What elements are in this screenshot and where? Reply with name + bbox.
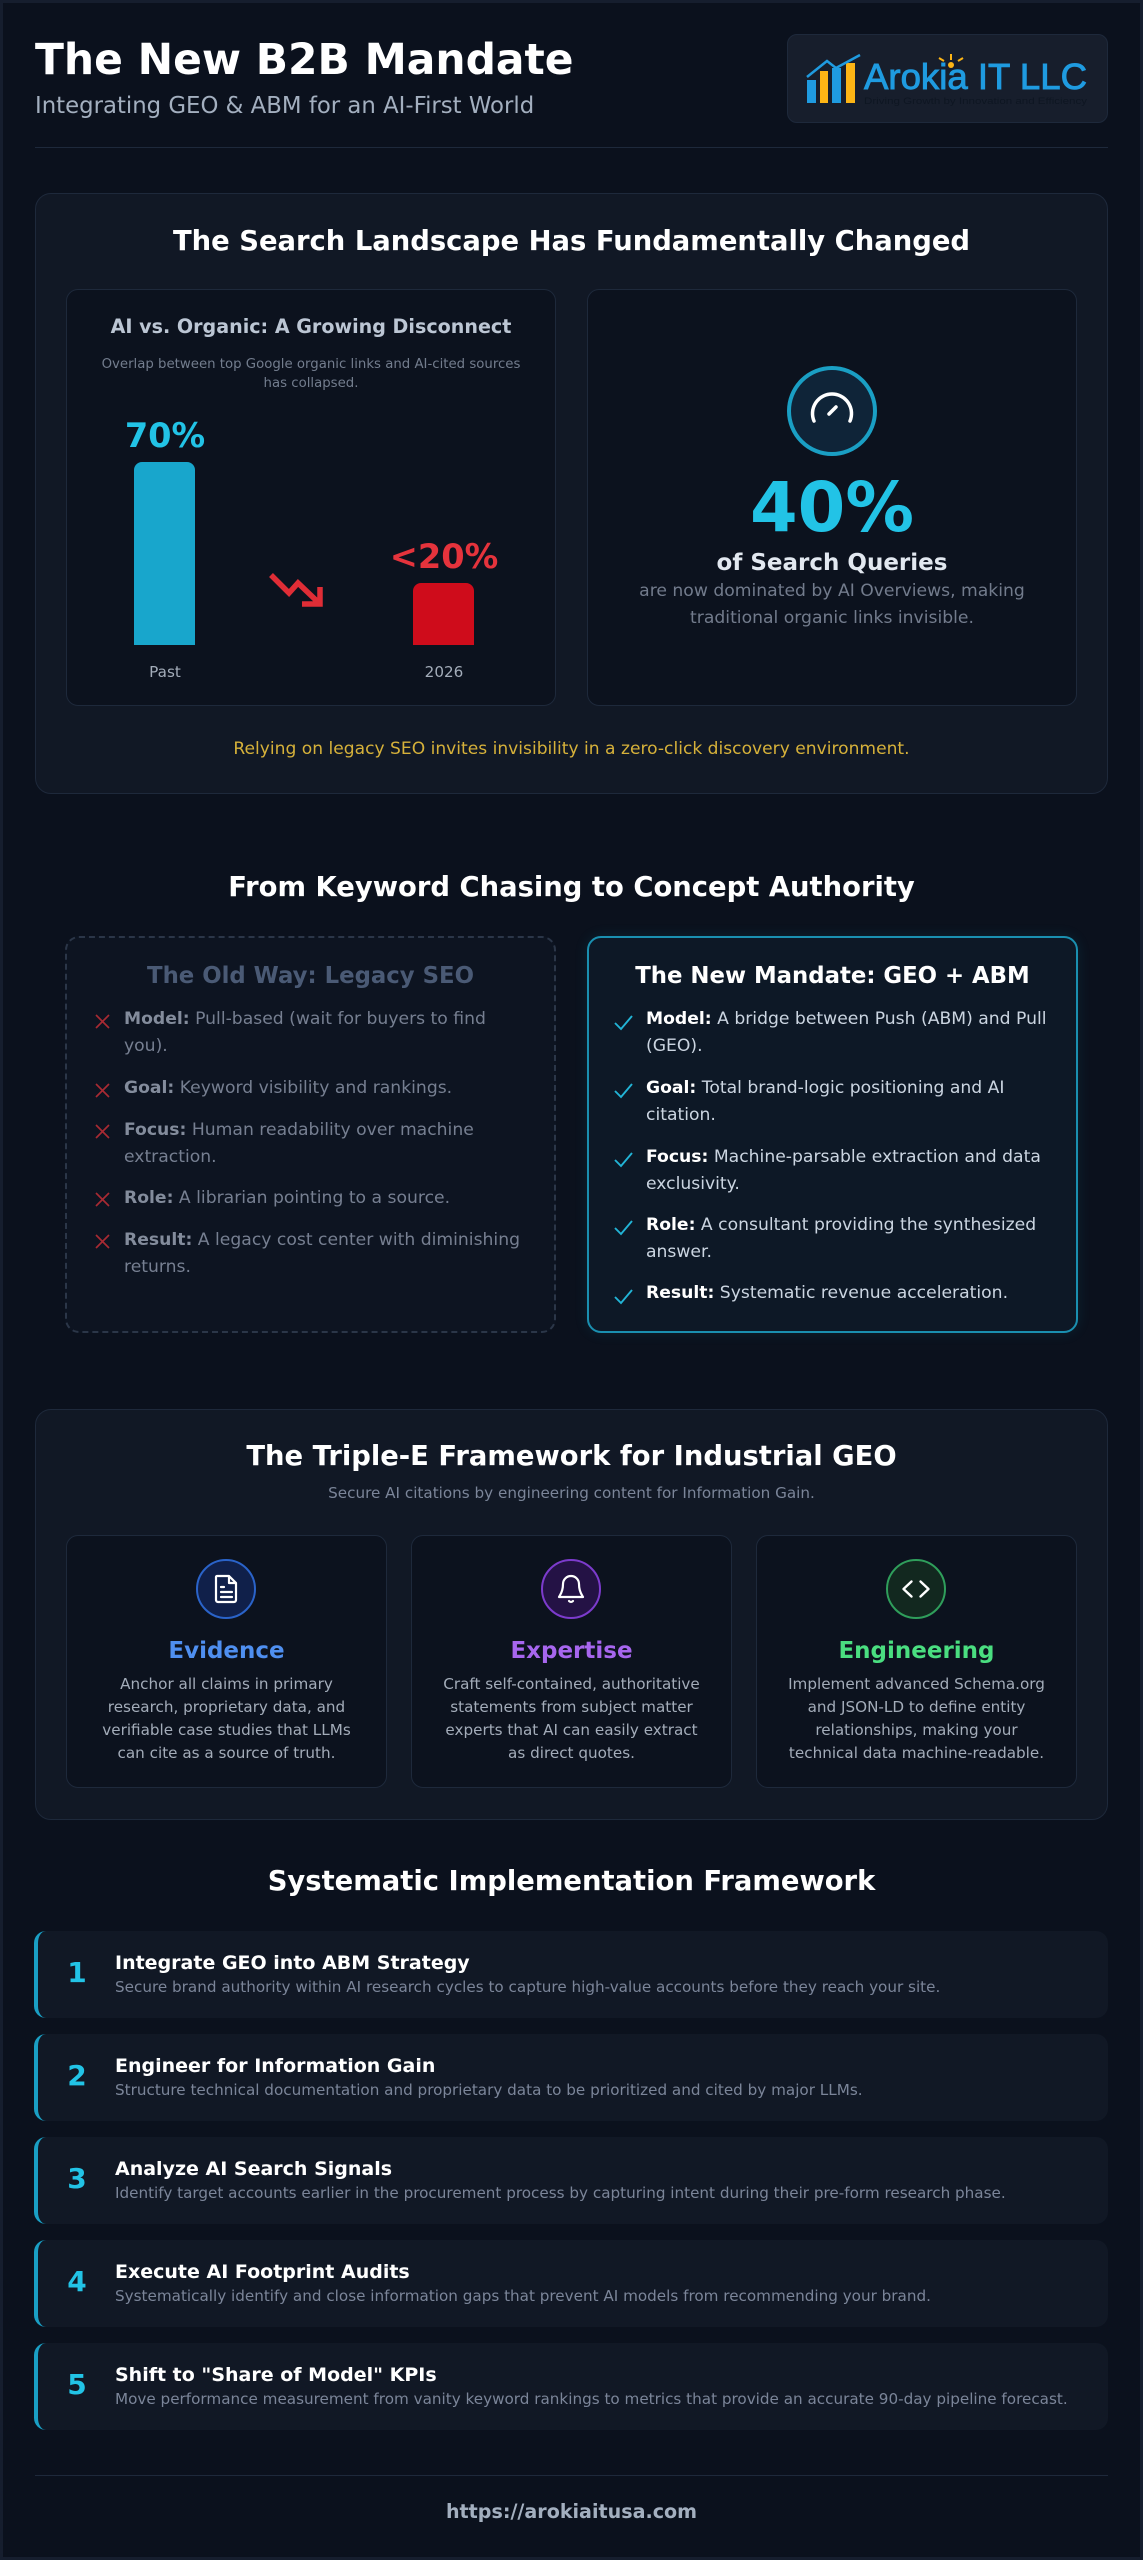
list item: goal: Goal: Total brand-logic positioning and AI	[646, 1078, 1004, 1098]
engineering title: Engineering	[838, 1638, 995, 1664]
logo	[787, 34, 1108, 123]
step description: Structure technical documentation and proprietary data to be prioritized and cited by major LLMs.	[115, 2081, 863, 2099]
card: expertise	[411, 1535, 732, 1788]
expertise text: experts that AI can easily extract	[445, 1721, 698, 1739]
value under 20%: <20%	[390, 537, 498, 576]
list item: focus: Focus: Human readability over machine	[124, 1120, 474, 1140]
icon: trending down arrow	[269, 573, 323, 607]
label past: Past	[149, 663, 181, 681]
step 5	[34, 2343, 1108, 2430]
evidence text: Anchor all claims in primary	[120, 1675, 333, 1693]
stat description	[639, 581, 1025, 628]
subheading: Secure AI citations by engineering content for Information Gain.	[328, 1484, 815, 1502]
card: engineering	[756, 1535, 1077, 1788]
icon: gauge	[787, 366, 877, 456]
engineering text: technical data machine-readable.	[789, 1744, 1044, 1762]
step number: 3	[67, 2162, 87, 2195]
expertise text: Craft self-contained, authoritative	[443, 1675, 700, 1693]
evidence text: research, proprietary data, and	[108, 1698, 345, 1716]
engineering text	[788, 1675, 1045, 1762]
title: The New B2B Mandate	[35, 35, 574, 84]
list item: focus: exclusivity.	[646, 1174, 740, 1194]
step description: Identify target accounts earlier in the procurement process by capturing intent during their pre-form research phase.	[115, 2184, 1006, 2202]
list item: result: returns.	[124, 1257, 191, 1277]
list item: model: Model: Pull-based (wait for buyers to find	[124, 1009, 486, 1029]
new mandate title: The New Mandate: GEO + ABM	[635, 963, 1030, 989]
engineering text: relationships, making your	[815, 1721, 1018, 1739]
subtitle: Integrating GEO & ABM for an AI-First World	[35, 93, 534, 119]
list item: focus: Focus: Machine-parsable extraction and data	[646, 1147, 1041, 1167]
step title: Integrate GEO into ABM Strategy	[115, 1952, 470, 1974]
logo tagline: Driving Growth by Innovation and Efficiency	[864, 96, 1088, 106]
icon: document	[196, 1559, 256, 1619]
step description: Secure brand authority within AI research cycles to capture high-value accounts before they reach your site.	[115, 1978, 940, 1996]
step number: 2	[67, 2059, 87, 2092]
panel: old way	[65, 936, 556, 1333]
chart description: has collapsed.	[264, 376, 358, 391]
list item: model: (GEO).	[646, 1036, 703, 1056]
step title: Execute AI Footprint Audits	[115, 2261, 410, 2283]
evidence text: verifiable case studies that LLMs	[102, 1721, 351, 1739]
value 70%: 70%	[125, 416, 205, 455]
step description: Move performance measurement from vanity keyword rankings to metrics that provide an accurate 90-day pipeline forecast.	[115, 2390, 1068, 2408]
expertise title: Expertise	[510, 1638, 633, 1664]
note: Relying on legacy SEO invites invisibility in a zero-click discovery environment.	[233, 739, 910, 759]
chart title: AI vs. Organic: A Growing Disconnect	[111, 315, 511, 338]
list item: goal: Goal: Keyword visibility and rankings.	[124, 1078, 452, 1098]
list item: goal: citation.	[646, 1105, 716, 1125]
icon: bell	[541, 1559, 601, 1619]
list item: role: Role: A librarian pointing to a source.	[124, 1188, 450, 1208]
list item: focus	[124, 1120, 474, 1167]
step 4	[34, 2240, 1108, 2327]
list item: result: Result: Systematic revenue acceleration.	[646, 1283, 1008, 1303]
expertise text: as direct quotes.	[508, 1744, 635, 1762]
list item: model: you).	[124, 1036, 168, 1056]
heading: implementation: Systematic Implementation Framework	[268, 1866, 875, 1897]
bar: past	[134, 462, 195, 645]
icon group: checks	[614, 1015, 633, 1304]
old way title: The Old Way: Legacy SEO	[147, 963, 474, 989]
expertise text: statements from subject matter	[450, 1698, 693, 1716]
heading: The Search Landscape Has Fundamentally Changed	[173, 226, 970, 257]
evidence text: can cite as a source of truth.	[118, 1744, 335, 1762]
stat description: traditional organic links invisible.	[690, 608, 974, 628]
panel: 40% stat	[587, 289, 1077, 706]
icon group: crosses	[96, 1014, 110, 1249]
header	[35, 34, 1108, 148]
icon: growth bars	[807, 54, 963, 103]
stat label: of Search Queries	[717, 550, 947, 576]
panel: triple-E framework	[35, 1409, 1108, 1820]
panel: AI vs organic chart	[66, 289, 556, 706]
chart description	[102, 357, 520, 391]
logo wordmark: Arokia IT LLC	[864, 56, 1087, 97]
list item: role: Role: A consultant providing the synthesized	[646, 1215, 1036, 1235]
list item: model	[124, 1009, 486, 1056]
footer url: https://arokiaitusa.com	[446, 2500, 697, 2523]
list item: role: answer.	[646, 1242, 712, 1262]
step title: Analyze AI Search Signals	[115, 2158, 392, 2180]
panel: search landscape	[35, 193, 1108, 794]
list item: result	[124, 1230, 520, 1277]
evidence text	[102, 1675, 351, 1762]
evidence title: Evidence	[168, 1638, 285, 1664]
card: evidence	[66, 1535, 387, 1788]
list item: result: Result: A legacy cost center with diminishing	[124, 1230, 520, 1250]
list item: model	[646, 1009, 1047, 1056]
list item: role	[646, 1215, 1036, 1262]
list item: model: Model: A bridge between Push (ABM) and Pull	[646, 1009, 1047, 1029]
step number: 4	[67, 2265, 87, 2298]
step title: Engineer for Information Gain	[115, 2055, 435, 2077]
step number: 5	[67, 2368, 87, 2401]
icon: code	[886, 1559, 946, 1619]
bar: 2026	[413, 583, 474, 645]
step number: 1	[67, 1956, 87, 1989]
engineering text: Implement advanced Schema.org	[788, 1675, 1045, 1693]
step title: Shift to "Share of Model" KPIs	[115, 2364, 437, 2386]
step 3	[34, 2137, 1108, 2224]
list item: goal	[646, 1078, 1004, 1125]
stat description: are now dominated by AI Overviews, making	[639, 581, 1025, 601]
step 2	[34, 2034, 1108, 2121]
stat value: 40%	[750, 468, 914, 548]
expertise text	[443, 1675, 700, 1762]
list item: focus	[646, 1147, 1041, 1194]
heading: keyword chasing: From Keyword Chasing to Concept Authority	[228, 872, 915, 903]
heading: The Triple-E Framework for Industrial GEO	[246, 1441, 897, 1472]
engineering text: and JSON-LD to define entity	[808, 1698, 1025, 1716]
step 1	[34, 1931, 1108, 2018]
step description: Systematically identify and close information gaps that prevent AI models from recommending your brand.	[115, 2287, 931, 2305]
panel: new mandate	[587, 936, 1078, 1333]
list item: focus: extraction.	[124, 1147, 217, 1167]
label 2026: 2026	[425, 663, 463, 681]
chart description: Overlap between top Google organic links and AI-cited sources	[102, 357, 520, 372]
